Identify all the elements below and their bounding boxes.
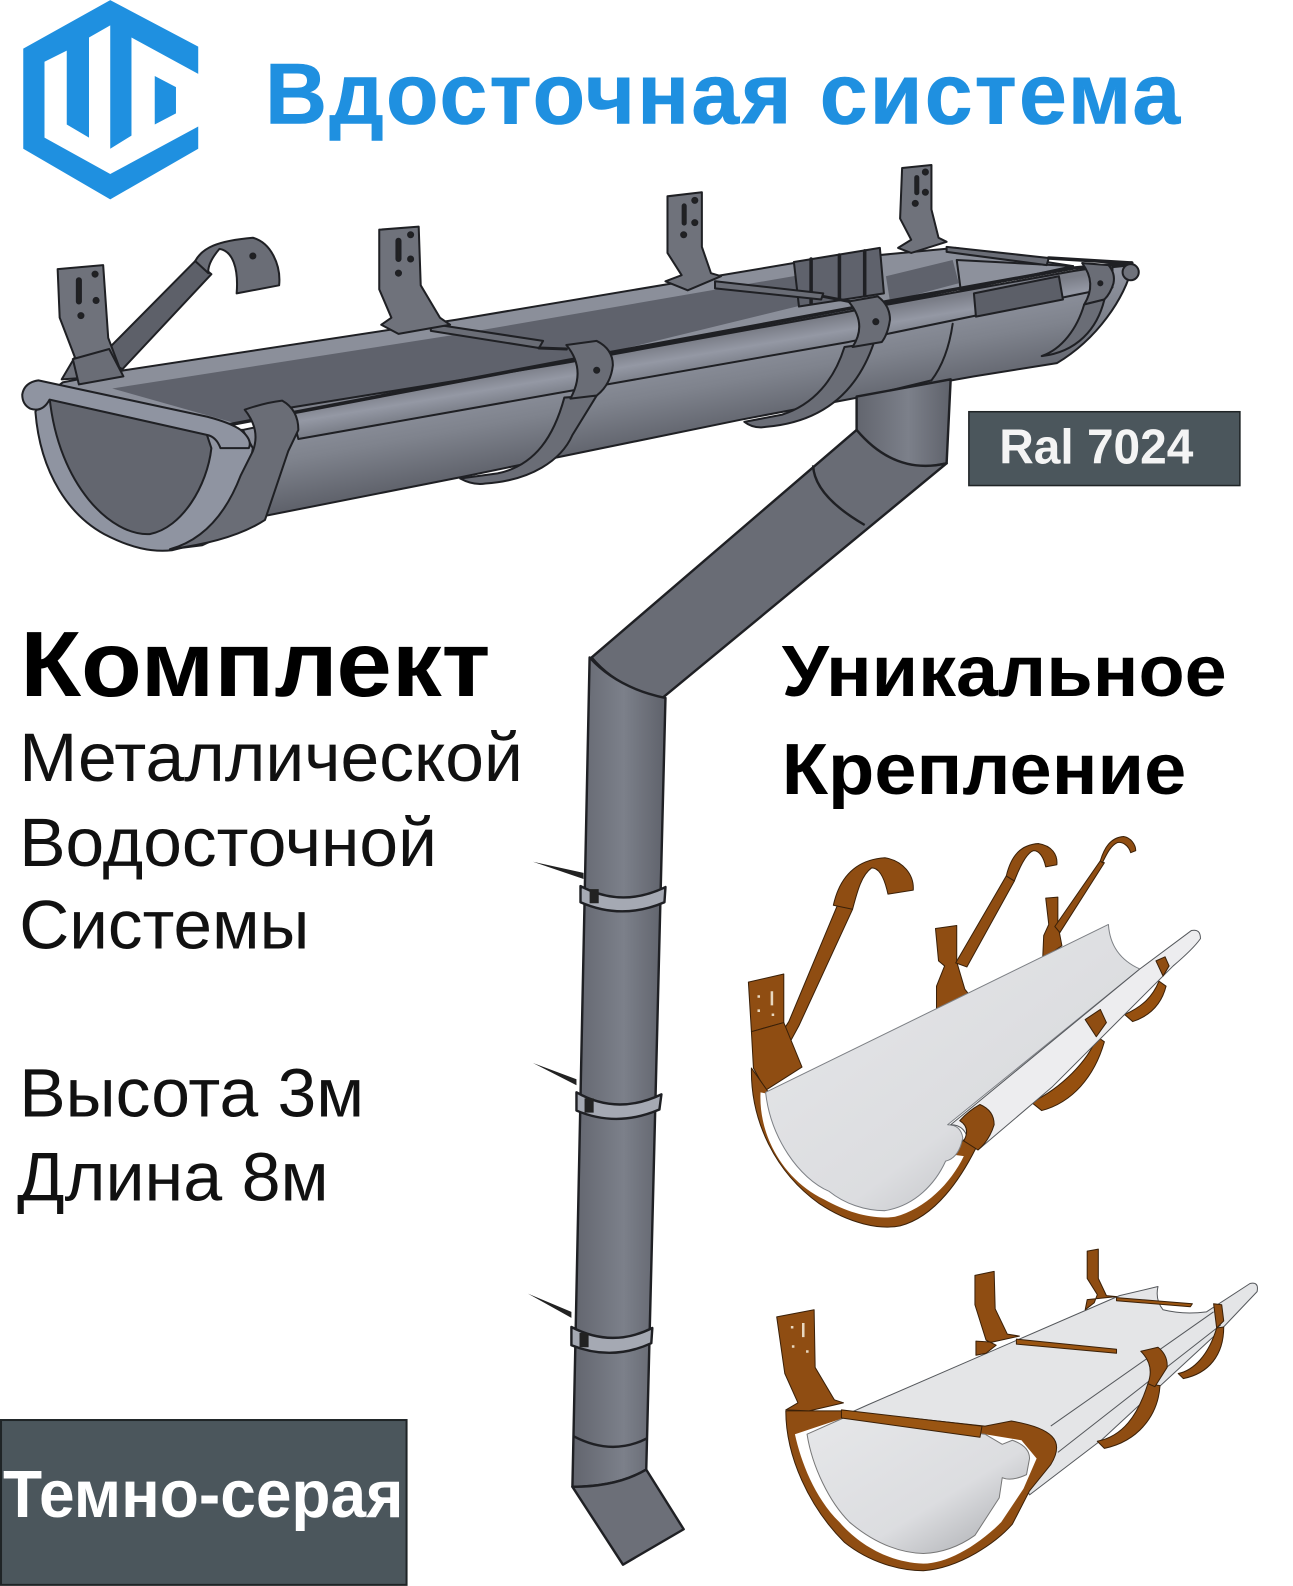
cross-section (807, 1418, 1030, 1554)
colour name badge (1, 1420, 407, 1585)
bracket 2 (975, 1271, 1019, 1355)
main gutter illustration (22, 165, 1139, 551)
wall clamps (581, 886, 665, 911)
front bead (951, 930, 1200, 1150)
text block: description: Системы (19, 887, 309, 964)
bracket 3 (665, 192, 721, 290)
text block: dimensions: Длина 8м (17, 1139, 329, 1216)
wall clamp bolts (579, 889, 599, 1347)
bracket 1 (748, 858, 913, 1090)
colour badge (969, 412, 1240, 486)
straps (431, 324, 543, 348)
gutter interior (50, 248, 1073, 429)
bracket 1 (777, 1310, 843, 1411)
straps and clamps (841, 1410, 982, 1437)
logo (23, 0, 198, 199)
bracket 3 (1043, 836, 1136, 959)
colour name badge: Темно-серая (3, 1458, 404, 1532)
lower hangers behind the gutter (1032, 981, 1166, 1111)
roller tube (290, 265, 1112, 439)
bracket 4 (898, 165, 947, 253)
brown saddle (751, 1068, 976, 1227)
heading: unique fastening (782, 631, 1227, 810)
text block: description (19, 719, 523, 964)
heading: unique fastening: Крепление (782, 729, 1186, 810)
downspout (528, 379, 951, 1565)
white gap (760, 1092, 964, 1218)
bracket 1 with hook (58, 238, 279, 384)
brown gutter, lower (777, 1249, 1257, 1571)
colour badge: Ral 7024 (999, 418, 1194, 474)
text block: description: Металлической (19, 719, 523, 796)
lower strap arcs (1097, 1327, 1224, 1448)
upper elbow (857, 379, 951, 470)
title: Вдосточная система (265, 46, 1181, 142)
connector block (794, 248, 884, 307)
text block: description: Водосточной (19, 804, 437, 881)
white gutter (766, 924, 1140, 1211)
wall pins (528, 862, 584, 1318)
bracket 3 (1085, 1249, 1117, 1310)
brown gutter, upper (748, 836, 1200, 1227)
heading: kit: Комплект (20, 612, 491, 716)
bracket 2 (935, 844, 1057, 1014)
outlet (572, 1470, 684, 1565)
straps (960, 1104, 994, 1150)
gutter body (170, 265, 1133, 549)
bracket 2 (379, 227, 450, 334)
vertical pipe (572, 657, 665, 1487)
diagonal pipe (592, 430, 947, 698)
text block: dimensions (17, 1055, 364, 1216)
brown saddle (786, 1411, 1057, 1571)
text block: dimensions: Высота 3м (19, 1055, 364, 1132)
end cap (35, 389, 253, 551)
clamps and straps (170, 401, 298, 549)
gutter body (809, 1283, 1257, 1495)
white gap (795, 1418, 1037, 1564)
heading: unique fastening: Уникальное (782, 631, 1227, 712)
